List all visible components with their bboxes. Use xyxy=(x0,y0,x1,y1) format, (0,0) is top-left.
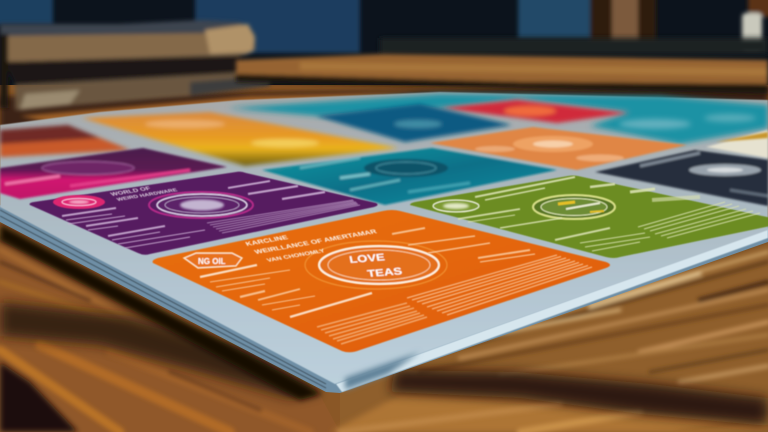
purple badge xyxy=(53,195,105,209)
panel: pale orange xyxy=(430,127,687,170)
panel: magenta xyxy=(0,148,227,199)
orange badge: NG OIL xyxy=(198,257,226,266)
purple title: WORLD OF xyxy=(110,186,152,197)
orange ring emblem: TEAS xyxy=(366,267,403,280)
paper stack edge xyxy=(0,205,768,393)
wood grain streaks xyxy=(0,238,768,432)
purple text lines xyxy=(62,181,360,248)
orange text lines xyxy=(200,228,592,344)
panel: red xyxy=(442,100,628,123)
books stack, top left xyxy=(0,20,768,135)
green text lines xyxy=(458,177,760,251)
background: blurred room xyxy=(0,0,768,90)
wooden shelf, background xyxy=(236,54,768,94)
teal ring xyxy=(364,159,448,177)
orange title: VAN CHONOMLY xyxy=(266,248,327,263)
panel: bright orange xyxy=(153,210,610,352)
panel: far teal strip xyxy=(228,94,768,144)
magenta ring xyxy=(42,162,134,174)
panel: gold and orange xyxy=(82,112,398,166)
purple ring emblem xyxy=(149,192,253,218)
panel: far right corner xyxy=(706,130,768,158)
orange title: WEIRLLANCE OF AMERTAMAR xyxy=(253,228,379,255)
panel: purple xyxy=(30,172,378,255)
paper sheet top surface xyxy=(0,92,768,384)
panel: olive green xyxy=(410,176,768,258)
green ring emblem xyxy=(533,195,615,219)
green badge xyxy=(433,200,479,212)
panel: deep blue xyxy=(316,104,512,142)
orange ring emblem: LOVE xyxy=(348,253,386,266)
panel: top-left red orange xyxy=(0,125,130,157)
purple title: WEIRD HARDWARE xyxy=(116,188,179,202)
orange title: KARCLINE xyxy=(244,234,290,247)
left side wood xyxy=(0,225,340,432)
orange ring emblem xyxy=(305,241,447,289)
far panels, out of focus xyxy=(0,94,768,170)
right side wood xyxy=(340,240,768,432)
panel: teal xyxy=(262,148,557,205)
panel: navy xyxy=(595,150,768,206)
paper shadow at front corner xyxy=(345,352,420,390)
table back area xyxy=(0,84,768,135)
orange badge xyxy=(184,253,242,268)
panel: right teal text xyxy=(619,114,756,129)
lower right warm wood xyxy=(330,395,768,432)
table shadows xyxy=(0,224,768,432)
